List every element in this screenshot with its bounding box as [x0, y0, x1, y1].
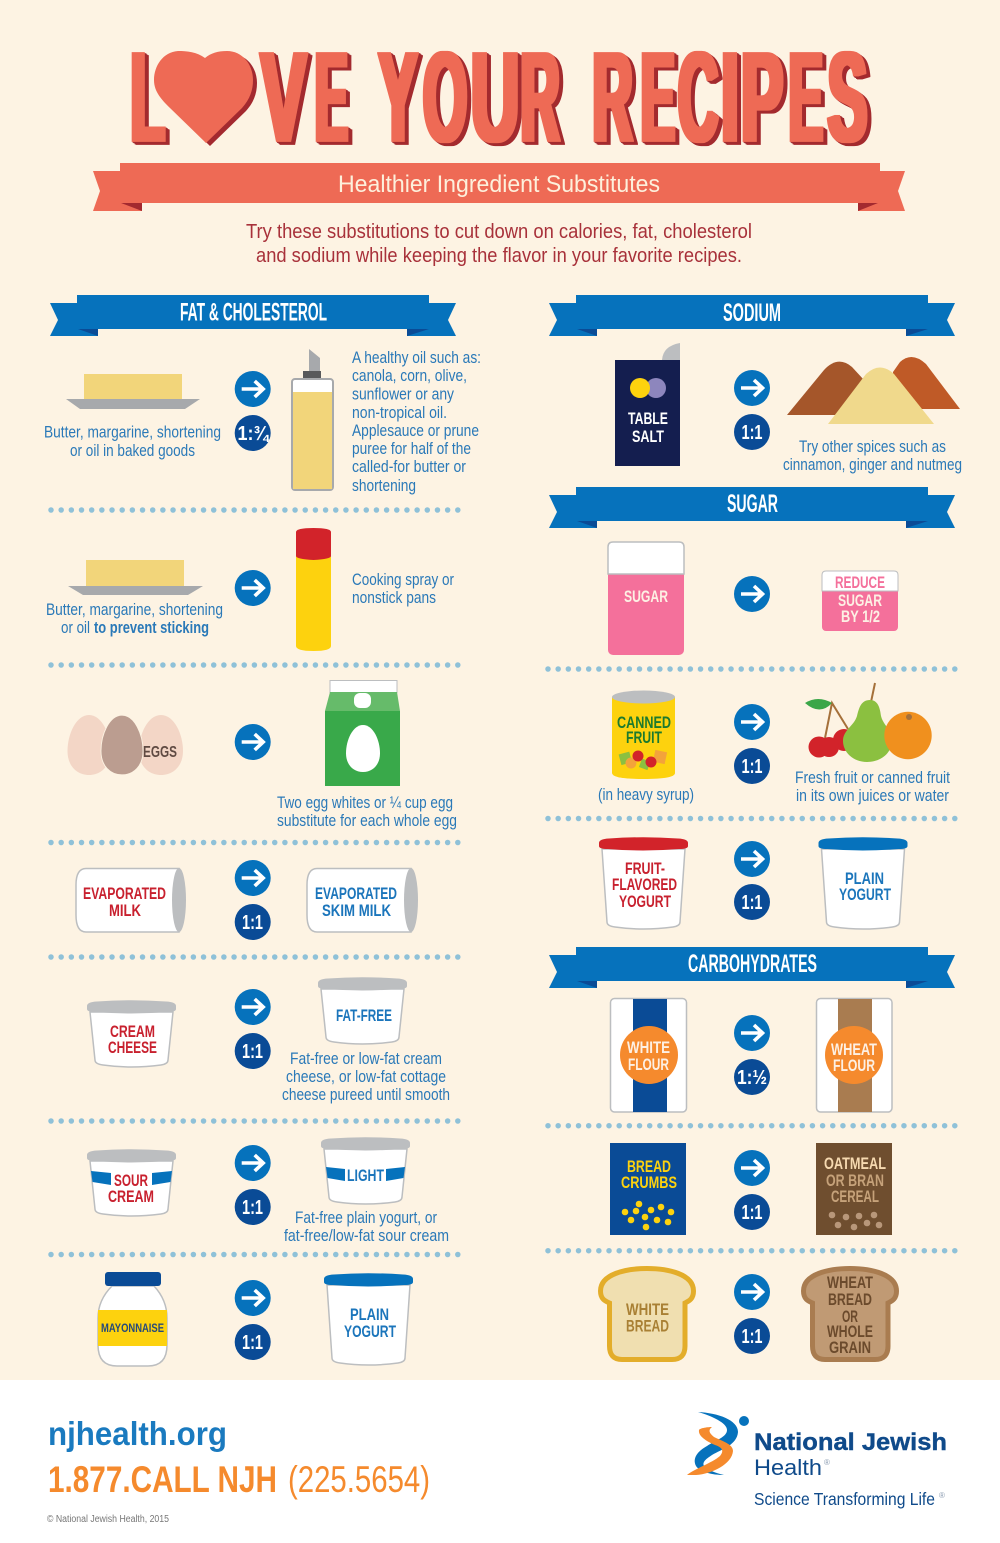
icon: white bread: BREAD [626, 1316, 669, 1336]
badge: ratio [734, 1059, 770, 1095]
title: R [520, 25, 560, 169]
badge: ratio [734, 1194, 770, 1230]
icon: wheat bread: OR [842, 1307, 858, 1326]
badge: ratio: 1:1 [242, 1041, 263, 1063]
icon: butter on plate [66, 374, 200, 409]
title: Y [378, 25, 418, 169]
title [130, 25, 867, 169]
badge: ratio: 1:¾ [238, 423, 271, 445]
icon: wheat flour bag: FLOUR [833, 1056, 875, 1075]
text: fat-free cream cheese: cheese, or low-fat cottage [286, 1068, 446, 1086]
icon: table salt box [615, 343, 680, 466]
title: V [260, 25, 306, 169]
logo: National Jewish Health: ® [824, 1458, 830, 1467]
icon: plain yogurt tub: YOGURT [344, 1322, 396, 1341]
arrow [235, 860, 271, 896]
intro text [246, 221, 752, 267]
icon: can evaporated skim milk: SKIM MILK [322, 901, 392, 920]
icon: plain yogurt tub [818, 837, 908, 929]
icon: light tub: LIGHT [347, 1166, 384, 1185]
copyright: © National Jewish Health, 2015 [47, 1514, 169, 1525]
panel: eggs to egg whites [68, 680, 457, 830]
arrow [734, 576, 770, 612]
arrow [734, 704, 770, 740]
text: egg substitute: Two egg whites or ¼ cup egg [277, 794, 453, 812]
text: fat-free cream cheese: Fat-free or low-fat cream [290, 1050, 442, 1068]
badge: ratio: 1:1 [742, 756, 762, 778]
icon: plain yogurt tub: PLAIN [350, 1305, 389, 1324]
icon: reduce sugar box: SUGAR [838, 591, 882, 610]
panel: sugar heading: SUGAR [727, 490, 778, 518]
icon: can evaporated skim milk: EVAPORATED [315, 884, 397, 903]
text: prevent sticking [46, 601, 223, 637]
logo: National Jewish Health [687, 1412, 947, 1509]
text: butter baked goods: or oil in baked goods [70, 442, 195, 460]
text: fat-free cream cheese: cheese pureed until smooth [282, 1086, 450, 1104]
icon: white flour bag: WHITE [627, 1038, 670, 1057]
icon: white bread [600, 1268, 694, 1360]
text: healthy oil: A healthy oil such as: [352, 349, 481, 367]
icon: can evaporated skim milk [307, 868, 418, 932]
icon: table salt box: SALT [632, 427, 664, 446]
website: njhealth.org [48, 1415, 227, 1452]
title: U [471, 25, 519, 169]
icon: plain yogurt tub: PLAIN [845, 869, 884, 888]
icon: white flour bag [610, 998, 686, 1112]
text: egg substitute: substitute for each whole egg [277, 812, 457, 830]
icon: oatmeal box [816, 1143, 892, 1235]
badge: ratio: 1:1 [742, 1326, 762, 1348]
text: fat-free yogurt: fat-free/low-fat sour cream [284, 1227, 449, 1245]
icon: sour cream tub: CREAM [108, 1187, 154, 1206]
panel: carbohydrates heading [549, 947, 955, 988]
arrow [235, 1145, 271, 1181]
panel: sugar heading [549, 487, 955, 528]
panel: sugar reduce [608, 542, 898, 655]
icon: canned fruit [612, 690, 675, 779]
badge: ratio [734, 884, 770, 920]
arrow [235, 570, 271, 606]
icon: fat-free tub: FAT-FREE [336, 1006, 392, 1025]
badge: ratio [235, 904, 271, 940]
panel: mayonnaise [98, 1272, 413, 1366]
badge: ratio: 1:1 [242, 912, 263, 934]
icon: heart [154, 51, 257, 146]
icon: white flour bag: FLOUR [628, 1055, 669, 1074]
badge: ratio [235, 1033, 271, 1069]
panel: carbohydrates heading: CARBOHYDRATES [688, 950, 817, 978]
text: prevent sticking: or oil [61, 619, 90, 637]
icon: sour cream tub: SOUR [114, 1171, 148, 1190]
text: healthy oil: Applesauce or prune [352, 422, 479, 440]
icon: wheat bread: BREAD [828, 1290, 872, 1309]
icon: eggs: EGGS [143, 744, 177, 761]
logo: National Jewish Health: Health [754, 1455, 822, 1480]
badge: ratio: 1:½ [737, 1067, 767, 1089]
title: I [721, 25, 739, 169]
text: butter baked goods: Butter, margarine, shortening [44, 424, 221, 442]
text: healthy oil: canola, corn, olive, [352, 367, 467, 385]
logo: National Jewish Health: ® [939, 1491, 945, 1500]
icon: canned fruit: FRUIT [626, 728, 662, 747]
badge: ratio: 1:1 [742, 1202, 762, 1224]
icon: bread crumbs box: BREAD [627, 1157, 671, 1176]
text: cooking spray: nonstick pans [352, 589, 436, 607]
text: healthy oil [352, 349, 481, 495]
footer [0, 1380, 1000, 1543]
panel: bread [600, 1268, 896, 1360]
icon: egg carton [325, 680, 400, 786]
icon: can evaporated milk: EVAPORATED [83, 884, 166, 903]
panel: evaporated milk [76, 860, 418, 940]
badge: ratio [734, 748, 770, 784]
panel: yogurt [599, 837, 908, 929]
title: L [130, 25, 165, 169]
icon: light tub [321, 1137, 410, 1204]
icon: table salt box: TABLE [628, 409, 668, 428]
title: P [741, 25, 783, 169]
icon: sugar box [608, 542, 684, 655]
icon: sour cream tub [87, 1149, 176, 1216]
text: healthy oil: puree for half of the [352, 440, 471, 458]
panel: butter in baked goods to healthy oil [44, 349, 481, 495]
text: fat-free yogurt: Fat-free plain yogurt, or [295, 1209, 437, 1227]
title: E [789, 25, 823, 169]
arrow [734, 841, 770, 877]
badge: ratio [235, 415, 271, 451]
arrow [235, 724, 271, 760]
icon: plain yogurt tub: YOGURT [839, 885, 891, 904]
icon: cream cheese tub [87, 1000, 176, 1067]
panel: bread crumbs [610, 1143, 892, 1235]
icon: white bread: WHITE [626, 1300, 669, 1319]
panel: cream cheese [87, 977, 450, 1104]
icon: can evaporated milk: MILK [109, 901, 142, 920]
text: heavy syrup: (in heavy syrup) [598, 786, 694, 804]
badge: ratio: 1:1 [242, 1197, 263, 1219]
icon: spice piles [787, 357, 960, 424]
icon: fat-free tub [318, 977, 407, 1044]
icon: fruit-flavored yogurt tub [599, 837, 688, 929]
badge: ratio: 1:1 [242, 1332, 263, 1354]
icon: can evaporated milk [76, 868, 186, 932]
title: C [678, 25, 718, 169]
text: fresh fruit [795, 769, 950, 805]
icon: wheat bread: GRAIN [829, 1338, 871, 1357]
icon: cream cheese tub: CREAM [110, 1022, 155, 1041]
text: prevent sticking: Butter, margarine, shortening [46, 601, 223, 619]
panel: sour cream [87, 1137, 449, 1245]
intro text: Try these substitutions to cut down on calories, fat, cholesterol [246, 221, 752, 243]
panel: canned fruit [598, 683, 950, 805]
arrow [734, 1150, 770, 1186]
icon: bread crumbs box [610, 1143, 686, 1235]
icon: mayonnaise jar [98, 1272, 167, 1366]
arrow [734, 1274, 770, 1310]
title: E [641, 25, 675, 169]
icon: reduce sugar box: BY 1/2 [841, 607, 880, 626]
icon: fruit-flavored yogurt tub: FLAVORED [612, 875, 677, 894]
icon: wheat bread: WHOLE [827, 1322, 873, 1341]
arrow [235, 371, 271, 407]
icon: oil bottle [292, 349, 333, 490]
icon: butter on plate [68, 560, 203, 595]
text: fresh fruit: Fresh fruit or canned fruit [795, 769, 950, 787]
panel: table salt to spices [615, 343, 962, 474]
icon: oatmeal box: OATMEAL [824, 1154, 886, 1173]
icon: sugar box: SUGAR [624, 587, 668, 606]
text: cooking spray: Cooking spray or [352, 571, 454, 589]
logo: National Jewish Health: Science Transforming Life [754, 1489, 935, 1509]
panel: fat and cholesterol heading: FAT & CHOLESTEROL [180, 298, 327, 326]
icon: oatmeal box: OR BRAN [826, 1171, 884, 1190]
arrow [235, 1280, 271, 1316]
banner: subtitle: Healthier Ingredient Substitutes [338, 171, 660, 198]
icon: wheat flour bag: WHEAT [831, 1040, 877, 1059]
logo: National Jewish Health: National Jewish [754, 1429, 947, 1456]
icon: fruit-flavored yogurt tub: FRUIT- [625, 859, 665, 878]
arrow [235, 989, 271, 1025]
phone number: (225.5654) [288, 1459, 430, 1500]
icon: wheat bread: WHEAT [827, 1273, 873, 1292]
badge: ratio [235, 1324, 271, 1360]
icon: bread crumbs box: CRUMBS [621, 1173, 677, 1192]
panel: fat and cholesterol heading [50, 295, 456, 336]
icon: spray can [296, 528, 331, 651]
text: spices: Try other spices such as [799, 438, 946, 456]
icon: wheat bread [804, 1268, 896, 1360]
text: spices [783, 438, 962, 474]
icon: oatmeal box: CEREAL [831, 1187, 879, 1206]
title: O [423, 25, 467, 169]
icon: canned fruit: CANNED [617, 713, 671, 732]
badge: ratio [734, 1318, 770, 1354]
badge: ratio [235, 1189, 271, 1225]
icon: fresh fruit [805, 683, 932, 762]
panel: sodium heading: SODIUM [723, 299, 781, 327]
text: cooking spray [352, 571, 454, 607]
arrow [734, 1015, 770, 1051]
icon: reduce sugar box [822, 571, 898, 631]
title: E [315, 25, 348, 169]
text: fat-free cream cheese [282, 1050, 450, 1104]
icon: mayonnaise jar: MAYONNAISE [101, 1321, 164, 1335]
text: fat-free yogurt [284, 1209, 449, 1245]
text: healthy oil: sunflower or any [352, 386, 455, 404]
text: butter baked goods [44, 424, 221, 460]
badge: ratio: 1:1 [742, 422, 762, 444]
badge: ratio: 1:1 [742, 892, 762, 914]
panel: butter to prevent sticking to cooking spray [46, 528, 454, 651]
text: spices: cinnamon, ginger and nutmeg [783, 456, 962, 474]
text: healthy oil: non-tropical oil. [352, 404, 447, 422]
text: healthy oil: shortening [352, 477, 416, 495]
phone number: 1.877.CALL NJH [48, 1459, 277, 1500]
banner: subtitle [93, 163, 905, 211]
icon: plain yogurt tub [324, 1273, 413, 1365]
text: prevent sticking: to prevent sticking [94, 619, 209, 637]
intro text: and sodium while keeping the flavor in your favorite recipes. [256, 245, 742, 267]
icon: cream cheese tub: CHEESE [108, 1038, 157, 1057]
icon: fruit-flavored yogurt tub: YOGURT [619, 892, 671, 911]
icon: wheat flour bag [816, 998, 892, 1112]
panel: sodium heading [549, 295, 955, 336]
text: fresh fruit: in its own juices or water [796, 787, 949, 805]
text: S [828, 25, 867, 169]
badge: ratio [734, 414, 770, 450]
text: egg substitute [277, 794, 457, 830]
arrow [734, 370, 770, 406]
text: healthy oil: called-for butter or [352, 458, 466, 476]
title: R [592, 25, 633, 169]
panel: flour [610, 998, 892, 1112]
icon: helix [687, 1412, 749, 1475]
icon: reduce sugar box: REDUCE [835, 573, 885, 592]
icon: eggs [68, 715, 183, 775]
